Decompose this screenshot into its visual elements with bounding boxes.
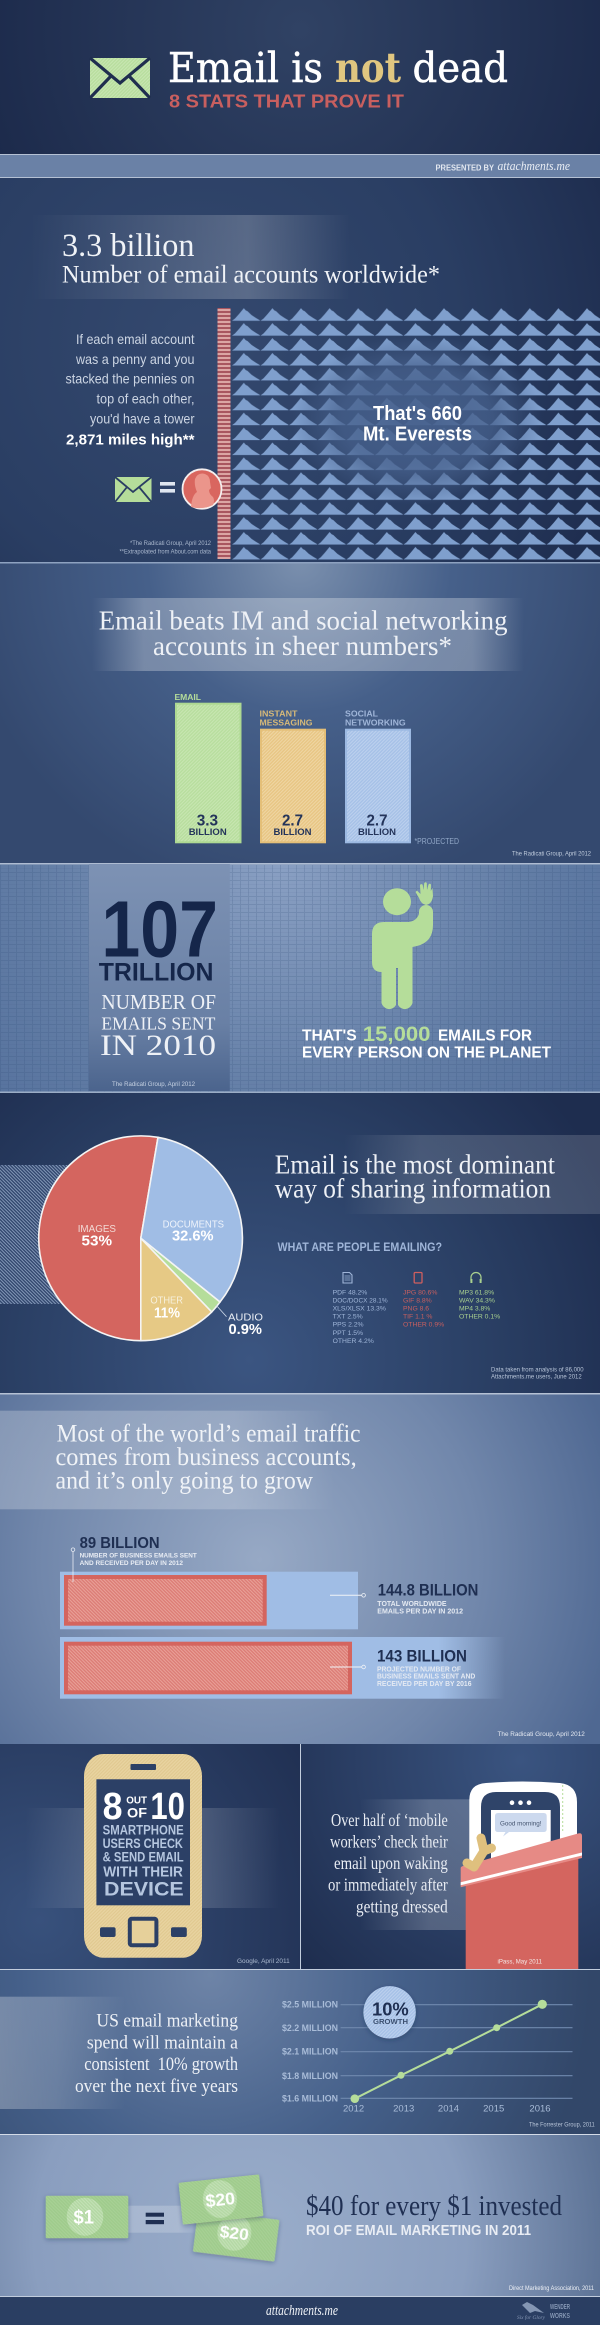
text block (328, 1810, 448, 1916)
panel: smartphone stat (0, 1744, 300, 1969)
callout: 89 billion: 89 BILLION (80, 1535, 160, 1552)
list: documents: PPS 2.2% (333, 1322, 364, 1329)
panel: accounts bar chart (0, 562, 600, 863)
list: documents: DOC/DOCX 28.1% (333, 1297, 388, 1304)
ROI text: $40 for every $1 invested (306, 2190, 562, 2222)
source: Attachments.me users, June 2012 (491, 1374, 582, 1381)
heading: Number of email accounts worldwide* (62, 262, 440, 289)
callout: 144.8 billion: EMAILS PER DAY IN 2012 (377, 1608, 463, 1615)
phone screen text: 10 (150, 1786, 185, 1828)
icon: headphones (470, 1272, 482, 1283)
title: dead (412, 44, 508, 92)
phone screen text (103, 1786, 185, 1900)
callout: 660 Everests (363, 403, 472, 446)
panel: sharing information pie (0, 1093, 600, 1393)
source notes: *The Radicati Group, April 2012 (130, 540, 212, 547)
icon: one dollar bill: $1 (74, 2207, 94, 2228)
line chart: $1.6 MILLION (282, 2094, 338, 2104)
source: iPass, May 2011 (498, 1958, 542, 1965)
list: documents: PPT 1.5% (333, 1330, 363, 1337)
stat card: NUMBER OF (101, 990, 216, 1014)
source (491, 1366, 584, 1381)
callout: 143 billion (330, 1647, 475, 1688)
text block: over the next five years (75, 2077, 238, 2097)
icon: smartphone (84, 1754, 202, 1958)
pie labels: 11% (154, 1305, 180, 1321)
text: emails per person: THAT'S (302, 1028, 357, 1045)
callout: 10% growth: GROWTH (373, 2017, 408, 2026)
pie labels: DOCUMENTS (163, 1218, 224, 1230)
panel: ROI of email marketing (0, 2134, 600, 2296)
text: emails per person: EVERY PERSON ON THE PLANET (302, 1044, 551, 1061)
title: Email is (168, 44, 323, 92)
pie labels: OTHER (150, 1295, 183, 1307)
subheading: WHAT ARE PEOPLE EMAILING? (278, 1242, 442, 1254)
bar: total 2012 vs business (60, 1572, 358, 1629)
source: The Forrester Group, 2011 (529, 2122, 595, 2128)
text block (75, 2012, 238, 2097)
bar: social networking: 2.7 (366, 813, 388, 830)
text block: workers’ check their (330, 1831, 448, 1851)
line chart: 2015 (483, 2104, 504, 2115)
projected note: *PROJECTED (414, 837, 459, 846)
line chart: 2016 (529, 2104, 551, 2115)
source: The Radicati Group, April 2012 (512, 851, 591, 858)
bar: social networking: NETWORKING (345, 717, 406, 727)
list: images: JPG 80.6% (403, 1289, 437, 1296)
list: documents: TXT 2.5% (333, 1314, 363, 1321)
bar: instant messaging: BILLION (274, 827, 312, 838)
callout: 144.8 billion (330, 1580, 478, 1615)
stat card: 107 (101, 885, 218, 974)
callout: 660 Everests: That's 660 (373, 403, 462, 425)
icon: upper twenty dollar bill: $20 (205, 2188, 236, 2211)
list: audio: WAV 34.3% (459, 1297, 495, 1304)
phone screen text: & SEND EMAIL (103, 1850, 184, 1865)
source: Data taken from analysis of 86,000 (491, 1366, 584, 1373)
list: images: GIF 8.8% (403, 1297, 432, 1304)
callout: 10% growth: 10% (372, 2000, 409, 2020)
bar: social networking: BILLION (358, 827, 396, 838)
pie chart (39, 1136, 242, 1341)
heading (62, 228, 440, 289)
bar: social networking: SOCIAL (345, 709, 378, 719)
heading (56, 1421, 360, 1494)
phone screen text: 8 (103, 1786, 122, 1828)
title: not (335, 44, 401, 92)
bar: social networking (345, 709, 410, 842)
paragraph (66, 331, 195, 449)
phone screen text: DEVICE (104, 1878, 184, 1900)
icon: person in bed holding device (461, 1782, 582, 1969)
icon: upper twenty dollar bill (179, 2174, 263, 2225)
source notes: **Extrapolated from About.com data (120, 548, 212, 556)
text block: US email marketing (96, 2012, 238, 2032)
bar: email: BILLION (189, 827, 227, 838)
list: documents: PDF 48.2% (333, 1289, 367, 1296)
line chart: 2012 (343, 2104, 364, 2115)
line chart (282, 2000, 572, 2115)
list: documents (333, 1289, 388, 1345)
icon: person in bed holding device: Good morning! (500, 1820, 542, 1827)
text block: Over half of ‘mobile (331, 1810, 448, 1830)
phone screen text: OUT (126, 1795, 147, 1806)
text block: spend will maintain a (87, 2033, 238, 2053)
heading: Most of the world’s email traffic (57, 1421, 360, 1448)
icon: document (343, 1272, 352, 1283)
phone screen text: OF (127, 1804, 147, 1820)
source: Direct Marketing Association, 2011 (509, 2286, 595, 2292)
paragraph: 2,871 miles high** (66, 432, 195, 449)
callout: 143 billion: BUSINESS EMAILS SENT AND (377, 1674, 475, 1681)
attachments.me wordmark: attachments.me (498, 158, 570, 173)
bar: instant messaging: 2.7 (282, 813, 303, 830)
callout: 143 billion: PROJECTED NUMBER OF (377, 1666, 462, 1673)
text block: email upon waking (334, 1853, 448, 1873)
list: audio: MP3 61.8% (459, 1289, 494, 1296)
callout: 89 billion: NUMBER OF BUSINESS EMAILS SENT (80, 1553, 197, 1560)
bar: projected 2016 (60, 1637, 505, 1699)
source: Google, April 2011 (237, 1958, 290, 1965)
callout: 660 Everests: Mt. Everests (363, 424, 472, 446)
paragraph: If each email account (76, 331, 195, 347)
panel: mobile workers stat (300, 1744, 600, 1969)
ROI text: ROI OF EMAIL MARKETING IN 2011 (306, 2223, 531, 2239)
heading: and it’s only going to grow (56, 1467, 313, 1494)
source: The Radicati Group, April 2012 (498, 1731, 585, 1738)
footer (0, 2296, 600, 2325)
callout: 143 billion: RECEIVED PER DAY BY 2016 (377, 1681, 472, 1688)
penny stack (218, 308, 230, 559)
text block: getting dressed (356, 1896, 448, 1916)
list: images: PNG 8.6 (403, 1306, 429, 1313)
icon: waving person (372, 882, 433, 1009)
text: emails per person (302, 1022, 551, 1061)
presented by label: PRESENTED BY (436, 164, 495, 172)
list: audio: OTHER 0.1% (459, 1314, 500, 1321)
heading: 3.3 billion (62, 228, 194, 264)
subtitle: 8 STATS THAT PROVE IT (169, 90, 405, 112)
icon: lower twenty dollar bill (193, 2210, 279, 2262)
bar: email: EMAIL (174, 692, 201, 702)
stat card: IN 2010 (100, 1029, 216, 1062)
heading: comes from business accounts, (56, 1444, 357, 1471)
paragraph: stacked the pennies on (66, 370, 194, 386)
line chart: $2.5 MILLION (282, 2000, 338, 2010)
paragraph: was a penny and you (75, 351, 194, 367)
stat card: EMAILS SENT (101, 1013, 215, 1033)
stat card (89, 864, 230, 1091)
bar: instant messaging (260, 709, 325, 842)
partner logos: WORKS (550, 2313, 570, 2320)
icon: tablet (414, 1272, 422, 1283)
icon: one dollar bill (46, 2196, 128, 2238)
ROI text (306, 2190, 562, 2239)
pie labels: AUDIO (228, 1312, 263, 1324)
callout: 89 billion: AND RECEIVED PER DAY IN 2012 (80, 1560, 183, 1567)
hatched band (0, 1165, 70, 1304)
paragraph: top of each other, (96, 390, 194, 406)
phone screen text: USERS CHECK (103, 1836, 183, 1851)
panel: marketing spend growth (0, 1969, 600, 2134)
pie labels: 53% (82, 1233, 112, 1249)
heading: way of sharing information (275, 1173, 551, 1203)
list: images: TIF 1.1 % (403, 1314, 432, 1321)
pie labels: 32.6% (172, 1229, 214, 1245)
line chart: 2014 (438, 2104, 459, 2115)
bar: email: 3.3 (197, 813, 218, 830)
line chart: 2013 (393, 2104, 414, 2115)
icon: envelope equals penny (115, 469, 222, 509)
list: images: OTHER 0.9% (403, 1322, 444, 1329)
callout: 143 billion: 143 BILLION (377, 1647, 467, 1666)
heading (99, 605, 507, 661)
list: documents: XLS/XLSX 13.3% (333, 1306, 386, 1313)
icon: lower twenty dollar bill: $20 (219, 2222, 250, 2244)
source notes (120, 540, 212, 556)
panel: business traffic (0, 1393, 600, 1744)
partner logos (517, 2302, 570, 2321)
text: emails per person: EMAILS FOR (438, 1028, 532, 1045)
phone screen text: WITH THEIR (103, 1864, 183, 1880)
panel: 3.3 billion email accounts (0, 178, 600, 562)
heading: accounts in sheer numbers* (153, 631, 452, 661)
footer wordmark: attachments.me (266, 2303, 338, 2319)
callout: 10% growth (363, 1986, 416, 2039)
callout: 144.8 billion: TOTAL WORLDWIDE (377, 1601, 447, 1608)
stat card: The Radicati Group, April 2012 (112, 1081, 195, 1088)
list: audio (459, 1289, 500, 1321)
pie labels (78, 1218, 263, 1338)
text: emails per person: 15,000 (363, 1022, 431, 1046)
title (168, 44, 508, 92)
text block: consistent 10% growth (84, 2055, 238, 2075)
band: presented by (0, 154, 600, 178)
list: documents: OTHER 4.2% (333, 1338, 374, 1345)
panel: header (0, 0, 600, 154)
callout: 89 billion (71, 1535, 197, 1582)
bar: email (174, 692, 240, 842)
equals sign (146, 2213, 164, 2224)
phone screen text: SMARTPHONE (103, 1823, 184, 1838)
line chart: $2.2 MILLION (282, 2023, 338, 2033)
mountain grid (232, 307, 600, 560)
heading: Email is the most dominant (275, 1149, 555, 1179)
list: audio: MP4 3.8% (459, 1306, 490, 1313)
bar: instant messaging: MESSAGING (260, 717, 313, 727)
partner logos: WENDER (550, 2304, 570, 2311)
list: images (403, 1289, 444, 1329)
pie labels: 0.9% (228, 1322, 262, 1338)
pie labels: IMAGES (78, 1223, 116, 1235)
callout: 144.8 billion: 144.8 BILLION (378, 1580, 478, 1599)
paragraph: you'd have a tower (90, 410, 195, 426)
heading: Email beats IM and social networking (99, 605, 507, 635)
line chart: $1.8 MILLION (282, 2071, 338, 2081)
partner logos: Six for Glory (517, 2314, 546, 2321)
heading (275, 1135, 600, 1214)
bar: instant messaging: INSTANT (260, 709, 298, 719)
text block: or immediately after (328, 1875, 448, 1895)
icon: envelope (90, 58, 150, 98)
panel: 107 trillion emails (0, 863, 600, 1093)
stat card: TRILLION (99, 959, 214, 987)
line chart: $2.1 MILLION (282, 2047, 338, 2057)
